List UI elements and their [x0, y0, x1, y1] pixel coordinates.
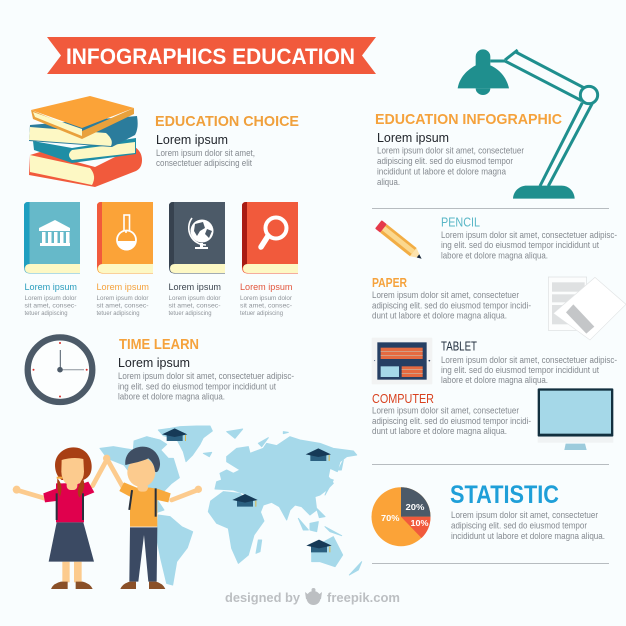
text: computer: COMPUTER [372, 392, 434, 406]
icon: tablet [372, 338, 432, 384]
pie chart: 20% [406, 502, 425, 512]
caption: book orange: tetuer adipiscing [96, 310, 140, 317]
icon: clock [28, 337, 92, 402]
world map [100, 426, 362, 585]
heading: education choice: consectetuer adipiscing elit [156, 158, 252, 168]
heading: education infographic [375, 111, 562, 187]
title banner [47, 37, 376, 74]
caption: book dark: sit amet, consec- [168, 302, 220, 310]
caption: book red: tetuer adipiscing [240, 310, 283, 317]
caption: book dark: Lorem ipsum [168, 282, 221, 292]
text: tablet [441, 340, 617, 385]
illustration: girl [13, 447, 107, 589]
icon: museum [39, 220, 70, 246]
heading: education choice: Lorem ipsum [156, 132, 228, 147]
text: paper: Lorem ipsum dolor sit amet, consectetuer [372, 290, 519, 300]
heading: time learn: Lorem ipsum dolor sit amet, consectetuer adipisc- [118, 371, 294, 381]
icon: graduation cap [162, 428, 187, 441]
icon: computer monitor [538, 388, 613, 450]
caption: book orange: sit amet, consec- [96, 302, 148, 310]
caption: book blue [24, 282, 77, 317]
caption: book orange [96, 282, 149, 317]
heading: education infographic: Lorem ipsum dolor sit amet, consectetuer [377, 146, 524, 156]
heading: time learn: ing elit. sed do eiusmod tempor incididunt ut [118, 382, 276, 392]
caption: book red: Lorem ipsum dolor [240, 295, 293, 302]
text: computer: Lorem ipsum dolor sit amet, consectetuer [372, 406, 519, 416]
text: computer: dunt ut labore et dolore magna aliqua. [372, 426, 507, 436]
text: paper [372, 276, 531, 320]
text: pencil: labore et dolore magna aliqua. [441, 250, 548, 260]
text: paper: adipiscing elit. sed do eiusmod tempor incidi- [372, 300, 531, 310]
text: tablet: TABLET [441, 340, 477, 354]
icon: freepik crown [305, 588, 322, 605]
caption: book red: Lorem ipsum [240, 282, 292, 292]
panel: book dark [169, 202, 225, 274]
caption: book blue: tetuer adipiscing [24, 310, 68, 317]
caption: book blue: Lorem ipsum [24, 282, 77, 292]
caption: book dark [168, 282, 221, 317]
caption: book dark: tetuer adipiscing [168, 310, 212, 317]
heading: statistic: incididunt ut labore et dolore magna aliqua. [451, 531, 605, 541]
illustration: boy [103, 447, 202, 589]
pie chart [372, 487, 431, 546]
watermark: designed by freepik [225, 588, 400, 605]
caption: book dark: Lorem ipsum dolor [168, 295, 221, 302]
text: pencil [441, 216, 617, 260]
heading: education infographic: incididunt ut labore et dolore magna [377, 166, 506, 176]
heading: education infographic: Lorem ipsum [377, 130, 449, 145]
text: paper: PAPER [372, 276, 407, 290]
text: tablet: ing elit. sed do eiusmod tempor incididunt ut [441, 365, 599, 375]
caption: book blue: sit amet, consec- [24, 302, 76, 310]
heading: time learn: TIME LEARN [119, 336, 199, 353]
text: computer [372, 392, 531, 436]
heading: statistic [450, 481, 605, 541]
pie chart: 70% [381, 513, 400, 523]
watermark: designed by freepik: designed by [225, 590, 301, 605]
icon: graduation cap [232, 494, 258, 507]
heading: education choice: Lorem ipsum dolor sit amet, [156, 148, 255, 158]
caption: book blue: Lorem ipsum dolor [24, 295, 77, 302]
heading: education choice [155, 113, 299, 168]
text: paper: dunt ut labore et dolore magna aliqua. [372, 310, 507, 320]
caption: book red [240, 282, 293, 317]
icon: globe [189, 218, 214, 249]
icon: magnifier [261, 218, 286, 247]
heading: time learn: labore et dolore magna aliqua. [118, 392, 225, 402]
heading: education infographic: aliqua. [377, 177, 400, 187]
panel: book orange [97, 202, 153, 274]
icon: paper sheets [548, 277, 626, 340]
heading: time learn [118, 336, 294, 402]
watermark: designed by freepik: freepik.com [327, 590, 400, 605]
icon: flask [117, 215, 136, 250]
heading: education infographic: EDUCATION INFOGRAPHIC [375, 111, 562, 128]
panel: book red [242, 202, 298, 274]
heading: statistic: Lorem ipsum dolor sit amet, consectetuer [451, 510, 598, 520]
icon: stack of books [29, 96, 142, 187]
icon: graduation cap [306, 540, 332, 552]
icon: graduation cap [306, 448, 331, 461]
text: pencil: ing elit. sed do eiusmod tempor incididunt ut [441, 240, 599, 250]
text: computer: adipiscing elit. sed do eiusmod tempor incidi- [372, 416, 531, 426]
heading: statistic: STATISTIC [450, 481, 559, 509]
heading: education infographic: adipiscing elit. sed do eiusmod tempor [377, 156, 513, 166]
caption: book orange: Lorem ipsum dolor [96, 295, 149, 302]
caption: book orange: Lorem ipsum [96, 282, 149, 292]
text: pencil: PENCIL [441, 216, 480, 230]
heading: time learn: Lorem ipsum [118, 355, 190, 370]
pie chart: 10% [410, 518, 429, 528]
heading: education choice: EDUCATION CHOICE [155, 113, 299, 130]
caption: book red: sit amet, consec- [240, 302, 292, 310]
icon: pencil [375, 220, 425, 263]
title banner: INFOGRAPHICS EDUCATION [66, 44, 355, 69]
text: tablet: labore et dolore magna aliqua. [441, 375, 548, 385]
icon: desk lamp [458, 49, 598, 199]
panel: book blue [24, 202, 80, 274]
heading: statistic: adipiscing elit. sed do eiusmod tempor [451, 520, 587, 530]
